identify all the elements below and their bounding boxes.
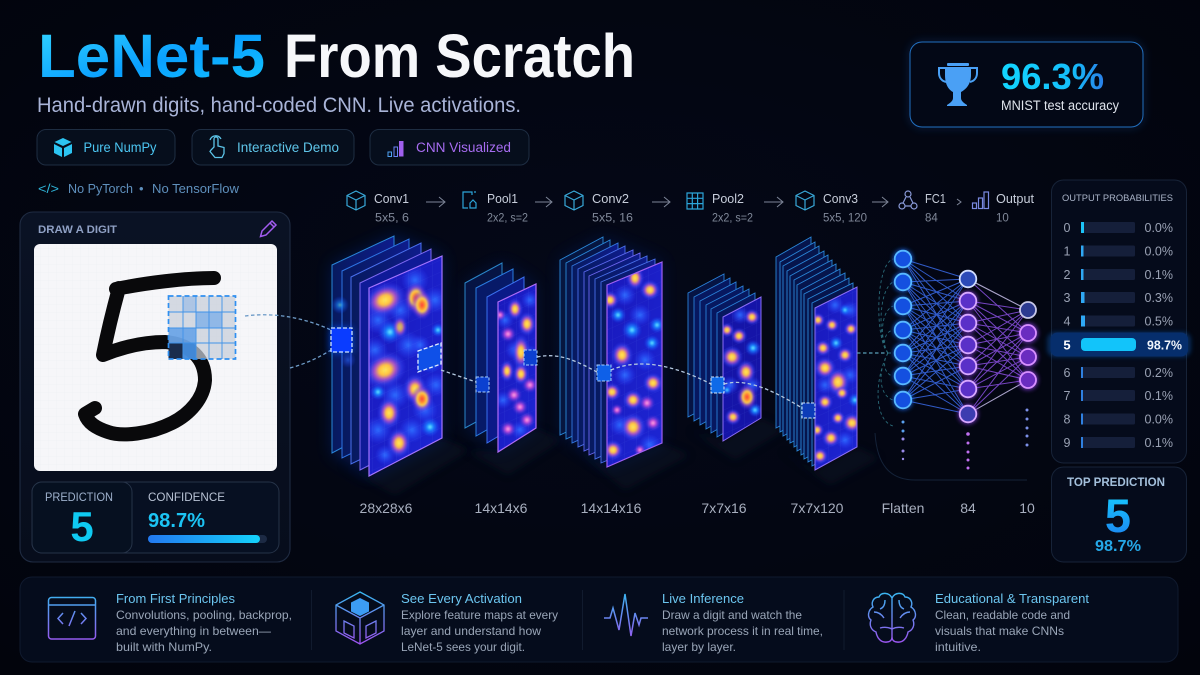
probability rows: 9 [1064,436,1071,450]
panel: feature strip [20,577,1178,662]
feature: live inference: layer by layer. [662,640,736,654]
panel: draw a digit [20,212,290,562]
panel: top prediction: TOP PREDICTION [1067,475,1165,489]
feature: live inference: Draw a digit and watch the [662,608,802,622]
panel: top prediction: 98.7% [1095,538,1141,555]
feature map front [368,255,443,477]
pipeline header [347,191,1035,224]
convolution kernel overlay [168,296,236,359]
feature: educational: Educational & Transparent [935,591,1089,606]
layer: Conv2 [565,191,633,224]
continuation dots [902,408,1028,470]
layer stack: Conv2 [560,237,690,490]
layer stack: Pool2 [688,273,772,453]
nodes: FC column [960,271,976,422]
dimension labels: 28x28x6 [360,500,413,516]
panel heading: DRAW A DIGIT [38,224,117,236]
confidence: 98.7% [148,510,205,532]
feature map front [814,286,858,471]
layer: Conv2: 5x5, 16 [592,212,633,224]
badge: Interactive Demo [192,130,354,165]
nodes: output column [1020,302,1036,388]
activation markers [331,328,815,418]
feature: first principles: From First Principles [116,591,235,606]
feature: educational: intuitive. [935,640,981,654]
feature: see every activation: Explore feature maps at every [401,608,558,622]
feature: see every activation: See Every Activation [401,591,522,606]
connections: FC to output [968,279,1028,414]
feature: live inference: Live Inference [662,591,744,606]
confidence [148,492,267,543]
icon: cube [54,138,72,157]
icon: network cube [336,592,384,644]
layer: Conv1: Conv1 [374,192,409,206]
no-framework note: </> [38,181,59,196]
layer: Pool2: Pool2 [712,192,744,206]
badge: CNN Visualized [370,130,529,165]
probability rows: 1 [1064,244,1071,258]
badge: Pure NumPy: Pure NumPy [84,140,157,155]
badge: Pure NumPy [37,130,175,165]
feature map front [606,261,663,468]
panel: output probabilities [1047,180,1191,463]
highlighted row: digit 5: 98.7% [1147,338,1182,352]
feature: live inference: network process it in real time, [662,624,823,638]
accuracy label: MNIST test accuracy [1001,98,1119,113]
probability rows: 0.5% [1144,314,1173,328]
icon: pencil [260,221,276,236]
flatten connectors [878,259,893,426]
layer: Pool1: Pool1 [487,192,518,206]
probability rows: 7 [1064,389,1071,403]
layer: Pool2: 2x2, s=2 [712,212,753,224]
icon: trophy [939,63,977,106]
layer: Conv3: Conv3 [823,192,858,206]
probability rows: 8 [1064,412,1071,426]
dimension labels: Flatten [882,500,924,516]
layer: Output: Output [996,192,1035,206]
layer: FC1 [899,191,946,224]
probability rows: 0.1% [1144,389,1173,403]
layer stack: Conv3 [776,236,866,478]
probability rows: 0.0% [1144,221,1173,235]
layer: Conv3: 5x5, 120 [823,212,867,224]
highlighted row: digit 5: 5 [1063,338,1071,352]
no-framework note: No TensorFlow [152,181,240,196]
accuracy card [910,42,1143,127]
no-framework note [38,181,240,196]
probability rows: 3 [1064,291,1071,305]
layer stack: Conv1 [331,236,470,495]
no-framework note: • [139,181,144,196]
icon: pointer hand [210,136,224,158]
icon: pulse [604,594,648,636]
layer: FC1: FC1 [925,192,946,206]
node glow [893,249,1038,424]
nodes: flatten column [895,251,911,408]
dimension labels: 7x7x120 [791,500,844,516]
feature map front [497,283,537,454]
panel: top prediction: 5 [1105,489,1131,542]
probability rows: 0.0% [1144,244,1173,258]
feature: first principles [48,591,292,654]
dimension labels [360,500,1035,516]
dimension labels: 7x7x16 [701,500,747,516]
dimension labels: 84 [960,500,976,516]
probability rows: 6 [1064,366,1071,380]
highlighted row: digit 5 [1047,332,1191,357]
feature: educational: Clean, readable code and [935,608,1070,622]
title [38,22,635,90]
feature map front [720,297,762,441]
layer: Pool2 [687,192,753,224]
feature: first principles: Convolutions, pooling, backprop, [116,608,292,622]
neural network [875,249,1038,480]
feature: see every activation [336,591,558,654]
feature: see every activation: layer and understand how [401,624,541,638]
layer: Conv2: Conv2 [592,192,629,206]
badge: CNN Visualized: CNN Visualized [416,140,511,155]
badge: Interactive Demo: Interactive Demo [237,140,339,155]
feature: live inference [604,591,823,654]
drawing canvas [34,244,277,471]
arrows between layers [426,197,961,207]
title: LeNet-5 [38,22,265,90]
prediction: 5 [70,503,94,550]
no-framework note: No PyTorch [68,181,133,196]
layer: Conv3 [796,191,867,224]
feature: first principles: and everything in between— [116,624,271,638]
dashed activation path [245,315,888,408]
probability rows: 0.0% [1144,412,1173,426]
layer: Conv1 [347,191,409,224]
feature: educational: visuals that make CNNs [935,624,1064,638]
probability rows: 4 [1064,314,1071,328]
result box [32,482,279,553]
panel: top prediction [1052,467,1186,562]
layer: Output [972,192,1035,224]
icon: code window [48,598,96,639]
probability rows: 0 [1064,221,1071,235]
layer: Output: 10 [996,212,1009,224]
layer: Pool1: 2x2, s=2 [487,212,528,224]
dimension labels: 14x14x16 [581,500,642,516]
icon: bars [388,141,404,156]
feature: see every activation: LeNet-5 sees your digit. [401,640,525,654]
confidence: CONFIDENCE [148,492,225,504]
probability rows: 0.1% [1144,268,1173,282]
subtitle: Hand-drawn digits, hand-coded CNN. Live activations. [37,94,521,117]
dimension labels: 10 [1019,500,1035,516]
prediction: PREDICTION [45,492,113,504]
feature: first principles: built with NumPy. [116,640,212,654]
probability rows: 0.2% [1144,366,1173,380]
digit 5 stroke [85,278,214,434]
dimension labels: 14x14x6 [475,500,528,516]
prediction [32,482,132,553]
probability rows: 0.1% [1144,436,1173,450]
icon: brain [869,593,915,642]
layer: Pool1 [463,192,528,224]
probability rows: 2 [1064,268,1071,282]
feature: educational [869,591,1089,654]
layer stack: Pool1 [465,263,562,475]
layer: Conv1: 5x5, 6 [375,212,409,224]
probability rows [1064,221,1173,450]
connections: flatten to FC [903,259,968,414]
title: From Scratch [284,22,635,90]
accuracy value: 96.3% [1001,56,1104,97]
probability rows: 0.3% [1144,291,1173,305]
panel heading: OUTPUT PROBABILITIES [1062,193,1173,204]
layer: FC1: 84 [925,212,938,224]
